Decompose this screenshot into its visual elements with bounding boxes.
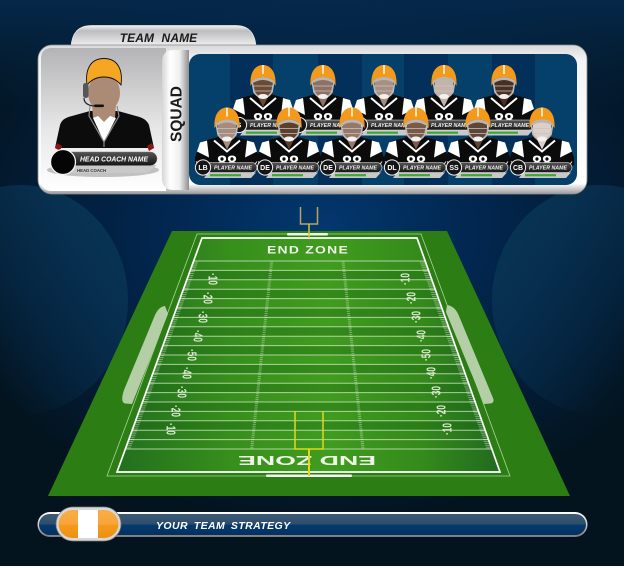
yard numbers: left: ·20 xyxy=(200,292,215,304)
squad column xyxy=(162,50,189,190)
orange badge xyxy=(56,507,121,541)
player DE second: DE xyxy=(323,165,333,172)
bench area: right xyxy=(446,305,494,404)
player DE: 88 xyxy=(279,152,299,172)
player back row 2: PLAYER NAME xyxy=(310,123,349,129)
player LB: PLAYER NAME xyxy=(214,166,253,172)
panel: team roster xyxy=(38,26,587,194)
player DE: DE xyxy=(260,165,270,172)
player CB: 88 xyxy=(532,152,552,172)
head coach figure xyxy=(55,58,154,151)
player SS: SS xyxy=(449,165,459,172)
player LB xyxy=(195,108,259,178)
squad column: SQUAD xyxy=(168,86,186,142)
player DE second: PLAYER NAME xyxy=(339,166,378,172)
yard numbers: left xyxy=(163,273,220,435)
yard numbers: left: ·10 xyxy=(163,423,178,435)
background arc: left xyxy=(0,185,128,415)
yard numbers: left: ·40 xyxy=(179,367,194,379)
player back row 1 xyxy=(231,65,295,136)
player back row 4: S xyxy=(418,122,423,130)
background arc: right xyxy=(492,185,626,415)
yard numbers: right xyxy=(398,273,455,435)
player DL: PLAYER NAME xyxy=(403,166,442,172)
yard numbers: right: ·40 xyxy=(424,367,439,379)
field boundary xyxy=(117,238,500,472)
inner hash marks xyxy=(250,261,273,449)
player DE: PLAYER NAME xyxy=(276,166,315,172)
yard numbers: right: ·20 xyxy=(434,405,449,417)
sideline ticks xyxy=(126,261,198,449)
player back row 3 xyxy=(352,65,416,136)
player back row 4: 88 xyxy=(434,110,454,130)
yard numbers: right: ·30 xyxy=(409,311,424,323)
yard numbers: left: ·10 xyxy=(205,273,220,285)
player back row 4: PLAYER NAME xyxy=(431,123,470,129)
player back row 5: S xyxy=(478,122,483,130)
yard numbers: left: ·40 xyxy=(190,330,205,342)
football field xyxy=(48,207,570,496)
head coach name plate: HEAD COACH xyxy=(77,168,106,173)
player back row 5 xyxy=(472,65,536,136)
field surround xyxy=(48,231,570,496)
end zone label: top: END ZONE xyxy=(267,244,349,256)
player SS: 88 xyxy=(468,152,488,172)
tab: team name: TEAM NAME xyxy=(120,31,198,45)
player DL: 88 xyxy=(406,152,426,172)
player DE second: 88 xyxy=(342,152,362,172)
player back row 2: S xyxy=(297,122,302,130)
yard numbers: right: ·10 xyxy=(398,273,413,285)
goal post: near xyxy=(266,411,352,477)
player DE xyxy=(257,108,321,178)
player DL xyxy=(384,108,448,178)
panel: coach background xyxy=(41,48,166,191)
player LB: LB xyxy=(198,165,208,172)
panel: player grid xyxy=(189,54,577,185)
yard numbers: left: ·30 xyxy=(195,311,210,323)
player back row 3: PLAYER NAME xyxy=(371,123,410,129)
bench area: left xyxy=(122,306,168,404)
yard numbers: right: ·50 xyxy=(419,349,434,361)
yard numbers: left: ·20 xyxy=(168,405,183,417)
player back row 2 xyxy=(291,65,355,136)
player back row 3: S xyxy=(358,122,363,130)
yard numbers: right: ·30 xyxy=(429,386,444,398)
yard numbers: right: ·10 xyxy=(440,423,455,435)
yard numbers: right: ·40 xyxy=(414,330,429,342)
player back row 1: S xyxy=(237,122,242,130)
strategy text: YOUR TEAM STRATEGY xyxy=(156,520,291,532)
player back row 1: 88 xyxy=(253,110,273,130)
player LB: 88 xyxy=(217,152,237,172)
player back row 3: 88 xyxy=(374,110,394,130)
player back row 4 xyxy=(412,65,476,136)
player CB: CB xyxy=(513,165,523,172)
playing surface xyxy=(118,239,498,471)
yard numbers: left: ·50 xyxy=(184,349,199,361)
player back row 5: PLAYER NAME xyxy=(491,123,530,129)
yard numbers: right: ·20 xyxy=(404,292,419,304)
head coach name plate xyxy=(47,150,159,177)
player DL: DL xyxy=(387,165,397,172)
player SS: PLAYER NAME xyxy=(465,166,504,172)
player SS xyxy=(446,108,510,178)
yard numbers: left: ·30 xyxy=(174,386,189,398)
goal post: far xyxy=(287,207,328,238)
player CB: PLAYER NAME xyxy=(529,166,568,172)
player back row 5: 88 xyxy=(494,110,514,130)
end zone label: bottom: END ZONE xyxy=(238,453,376,467)
tab: team name xyxy=(71,26,256,47)
player CB xyxy=(510,108,574,178)
head coach name plate: HEAD COACH NAME xyxy=(80,154,149,164)
player back row 2: 88 xyxy=(313,110,333,130)
player back row 1: PLAYER NAME xyxy=(250,123,289,129)
player DE second xyxy=(320,108,384,178)
strategy bar xyxy=(37,507,588,541)
